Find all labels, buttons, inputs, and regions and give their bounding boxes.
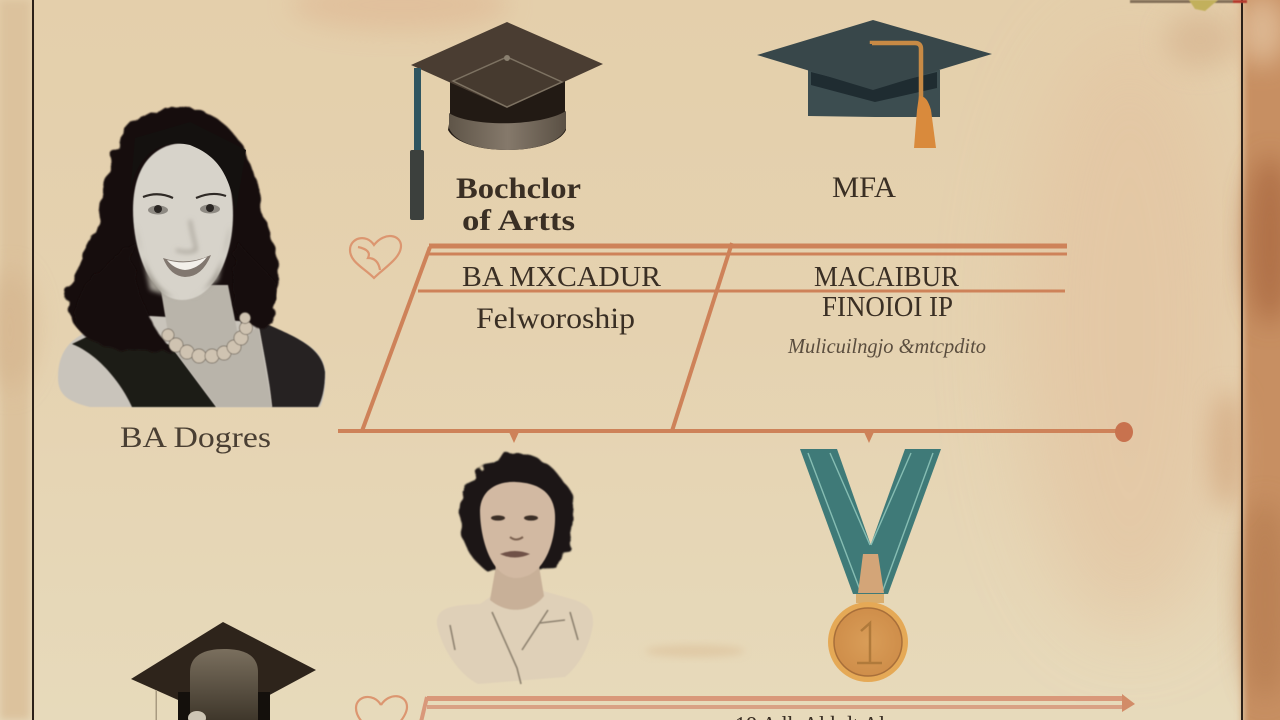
table cell: MFA MacArthur fellowship: FINOIOI IP [822,292,953,323]
table cell: MFA MacArthur fellowship: Mulicuilngjo &mtcpdito [787,334,986,358]
table cell: MFA MacArthur fellowship: MACAIBUR [814,261,960,293]
icon: heart doodle top [350,236,401,278]
portrait: woman with curly hair [58,107,325,407]
blouse folds [450,610,578,684]
neck [490,560,544,610]
eyebrows [143,194,226,198]
heading: Bachelor of Arts [456,172,581,237]
nose shade [176,220,196,252]
timeline end marker [1115,422,1133,442]
icon: brown graduation cap [410,22,603,220]
facial features [491,515,538,558]
eyes [148,204,220,214]
body with shoulders [58,316,325,407]
lower timeline rule with arrowhead [421,694,1135,720]
icon: gold medal with teal ribbon [800,449,941,682]
icon: slate graduation cap with orange tassel [757,20,992,148]
necklace [162,312,252,363]
icon: dark graduation cap, bottom left [131,622,316,720]
hair [459,454,575,573]
heading: MFA: MFA [832,171,896,204]
table cell: BA MacArthur fellowship [462,261,662,335]
face [133,143,233,300]
cheek shading [136,225,230,298]
blouse [437,590,593,684]
dress left strap [72,328,216,407]
hair over forehead [130,122,246,210]
hair back [66,107,280,339]
heading: Bachelor of Arts: Bochclor [456,172,581,205]
heading: Bachelor of Arts: of Artts [462,204,575,237]
table cell: BA MacArthur fellowship: Felworoship [476,302,635,335]
timeline table grid [338,243,1122,443]
dress right side [258,320,325,407]
neck and chest [160,285,272,407]
face [480,482,555,578]
front hair locks [72,240,279,352]
portrait: older woman [437,454,593,684]
table cell: BA MacArthur fellowship: BA MXCADUR [462,261,662,293]
label: BA degree caption: BA Dogres [120,421,271,454]
icon: heart doodle bottom [356,696,407,720]
table cell: MFA MacArthur fellowship [787,261,986,358]
corner ornament [1130,0,1247,11]
mouth [163,255,211,277]
